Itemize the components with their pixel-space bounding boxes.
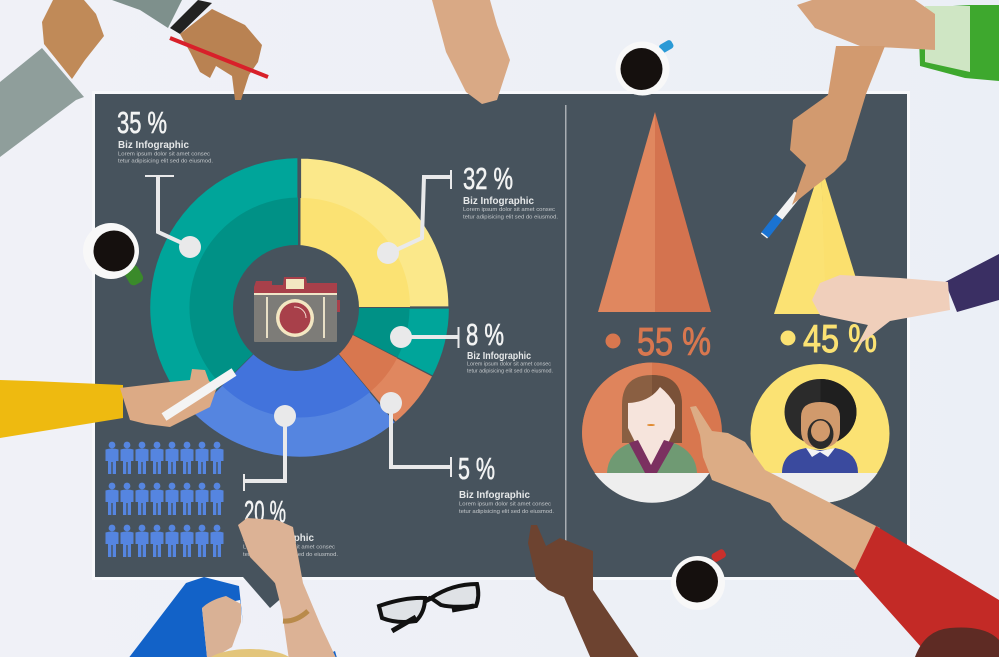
icon: camera [254,277,340,342]
label: 5% [458,451,554,515]
label: 32% [463,161,558,220]
label: 8%: Biz Infographic [467,350,531,362]
pointer: 5% [380,392,451,477]
label: 20%: 20 % [244,494,286,529]
poster board [92,91,910,608]
label: 8%: tetur adipisicing elit sed do eiusmod. [467,368,553,374]
pointer: 20% [244,405,296,491]
label: 20% [243,494,338,558]
triangle: yellow 45% [774,165,867,314]
label: 5%: tetur adipisicing elit sed do eiusmod. [459,509,554,515]
coffee cup: top [616,39,675,96]
glasses [379,584,478,631]
label: 35%: tetur adipisicing elit sed do eiusmod. [118,158,213,164]
label: 5%: Biz Infographic [459,489,530,501]
hand: bottom with bracelet [238,518,337,657]
hand: bottom right with red sleeve [690,406,999,657]
pointer: 35% [145,176,201,258]
label: 35%: 35 % [117,105,167,140]
hand: right with plaid sleeve [812,254,999,345]
triangle: orange 55% [598,112,711,312]
stat: 45%: 45 % [803,318,877,361]
coffee cup: bottom [671,548,727,610]
pointer: 8% [390,326,458,348]
label: 8%: Lorem ipsum dolor sit amet consec [467,362,551,368]
hand: dark bottom centre [528,525,646,657]
label: 35%: Lorem ipsum dolor sit amet consec [118,152,210,158]
hand: top centre [432,0,510,104]
label: 32%: Biz Infographic [463,195,534,207]
hand: pointing with blue marker [764,46,885,236]
avatar: man [750,364,890,503]
slice: yellow 32% [300,158,449,307]
hand: yellow sleeve with white marker [0,369,234,438]
hand: top-left with pencil [112,0,268,100]
label: 20%: Biz Infographic [243,532,314,544]
stat: 55% [606,321,711,364]
stat: 45% [780,318,877,361]
hand: top right with green sleeve [797,0,999,81]
slice: teal 8% [300,308,450,376]
donut hole [233,245,359,371]
people pictogram [106,442,224,557]
centre divider [565,105,566,545]
coffee cup: left [83,223,145,287]
slice: teal 35% [150,158,300,414]
label: 32%: Lorem ipsum dolor sit amet consec [463,207,555,213]
label: 5%: Lorem ipsum dolor sit amet consec [459,502,551,508]
label: 20%: Lorem ipsum dolor sit amet consec [243,544,335,550]
slice: orange 5% [300,308,433,422]
avatar: woman [582,362,722,503]
slice: blue 20% [194,308,396,457]
label: 8% [466,317,553,374]
person: blonde hair [205,649,295,657]
label: 32%: tetur adipisicing elit sed do eiusmod. [463,214,558,220]
label: 20%: tetur adipisicing elit sed do eiusmod. [243,552,338,558]
stat: 55%: 55 % [637,321,711,364]
pointer: 32% [377,170,451,264]
person: blue shirt and arm [121,577,339,657]
label: 32%: 32 % [463,161,513,196]
label: 35%: Biz Infographic [118,139,189,151]
label: 5%: 5 % [458,451,495,486]
hand: top-left with grey sleeve [0,0,104,157]
donut chart [150,158,450,457]
label: 35% [117,105,213,164]
label: 8%: 8 % [466,317,504,352]
